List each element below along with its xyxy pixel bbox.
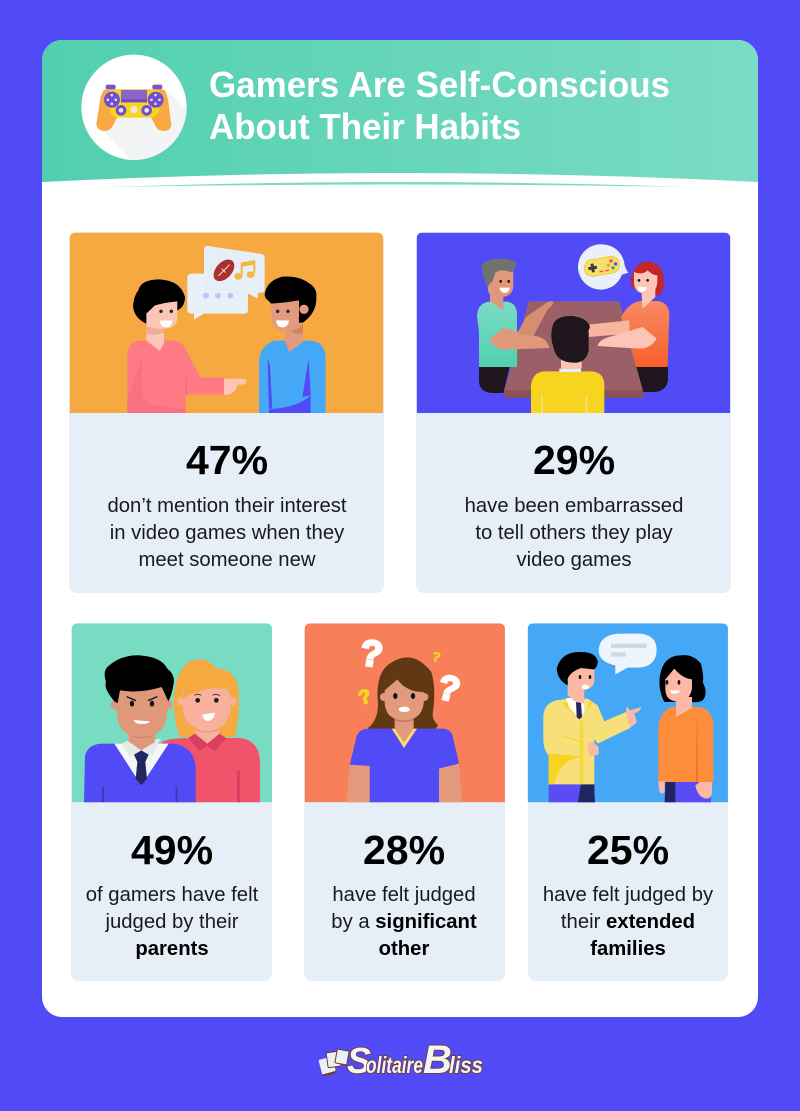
logo: Solitaire Bliss: liss — [449, 1052, 483, 1078]
description: have felt judged — [332, 884, 476, 906]
stat: 28% — [363, 827, 445, 873]
description: their extended — [561, 911, 695, 933]
illustration: man talking to woman — [528, 623, 728, 804]
description — [108, 495, 347, 571]
illustration: confused woman: ? — [431, 649, 442, 665]
description: have been embarrassed — [465, 495, 683, 517]
icon: game controller — [81, 55, 190, 163]
description: judged by their — [104, 911, 239, 933]
logo: Solitaire Bliss: B — [423, 1038, 452, 1082]
icon: playing cards — [318, 1049, 349, 1077]
description: by a significant — [331, 911, 477, 933]
right person — [259, 341, 326, 414]
panel: 49% parents — [71, 623, 272, 981]
title: About Their Habits — [209, 106, 521, 147]
stat: 47% — [186, 437, 268, 483]
left man — [479, 365, 510, 393]
illustration: three people at a table — [417, 233, 730, 414]
description: meet someone new — [138, 549, 316, 571]
stat: 29% — [533, 437, 615, 483]
panel: 47% don't mention — [69, 232, 384, 593]
description — [543, 884, 714, 960]
illustration: confused woman: ? — [358, 632, 386, 675]
main white panel — [42, 40, 758, 1017]
description: have felt judged by — [543, 884, 714, 906]
right woman — [636, 365, 668, 392]
description — [331, 884, 477, 960]
man — [549, 782, 595, 804]
description: don’t mention their interest — [108, 495, 347, 517]
title: Gamers Are Self-Conscious — [209, 64, 670, 105]
description: families — [590, 938, 666, 960]
description — [86, 884, 259, 960]
description: parents — [135, 938, 209, 960]
logo: Solitaire Bliss: S — [347, 1040, 371, 1081]
illustration: parents — [72, 623, 272, 804]
illustration: confused woman — [304, 623, 505, 804]
description: to tell others they play — [475, 522, 673, 544]
description: video games — [516, 549, 632, 571]
title — [209, 64, 670, 147]
description: of gamers have felt — [86, 884, 259, 906]
illustration: confused woman: ? — [434, 667, 464, 710]
description — [465, 495, 683, 571]
father — [84, 744, 196, 804]
panel: 29% embarrassed — [416, 232, 731, 593]
woman — [665, 782, 711, 804]
logo: Solitaire Bliss — [318, 1038, 483, 1082]
illustration: confused woman: ? — [356, 685, 373, 710]
center man — [531, 371, 604, 414]
left person — [127, 341, 224, 414]
panel: 28% significant other — [304, 623, 505, 981]
logo: Solitaire Bliss: olitaire — [366, 1052, 423, 1078]
stat: 49% — [131, 827, 213, 873]
panel: 25% extended families — [528, 623, 728, 981]
description: in video games when they — [110, 522, 345, 544]
thought bubble — [578, 244, 629, 290]
illustration: two people talking — [70, 233, 383, 414]
description: other — [379, 938, 429, 960]
header band — [42, 40, 758, 185]
stat: 25% — [587, 827, 669, 873]
header accent arc — [111, 182, 687, 187]
